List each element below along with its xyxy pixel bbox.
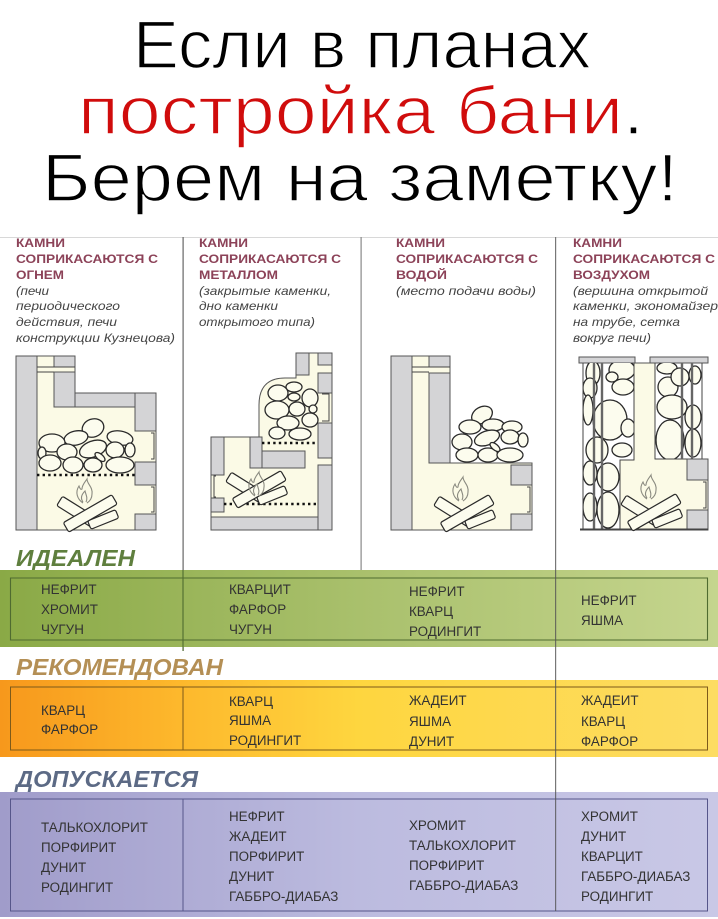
ideal column 2 list: ФАРФОР <box>229 602 286 617</box>
title line 2: постройка бани . <box>78 73 644 149</box>
recommended column 2 list <box>229 694 301 748</box>
column 1 note: конструкции Кузнецова) <box>16 331 175 345</box>
allowed column 2 list: ГАББРО-ДИАБАЗ <box>229 889 338 904</box>
column 2 note: дно каменки <box>199 299 278 313</box>
recommended column 3 list: ЯШМА <box>409 714 451 729</box>
ideal column 3 list: НЕФРИТ <box>409 584 465 599</box>
allowed column 3 list: ТАЛЬКОХЛОРИТ <box>409 838 516 853</box>
column 4 note: каменки, экономайзер <box>573 299 718 313</box>
column 4 note: на трубе, сетка <box>573 315 680 329</box>
title line 3: Берем на заметку! <box>42 140 678 216</box>
column 2 note: открытого типа) <box>199 315 315 329</box>
allowed column 2 list <box>229 809 338 904</box>
allowed column 3 list: ПОРФИРИТ <box>409 858 484 873</box>
column 4 note: вокруг печи) <box>573 331 651 345</box>
panel: column 4 stones touch air <box>573 236 718 531</box>
title <box>42 7 678 216</box>
column 4 note: (вершина открытой <box>573 284 708 298</box>
column 2 heading: СОПРИКАСАЮТСЯ С <box>199 252 341 266</box>
column 1 heading: ОГНЕМ <box>16 268 64 282</box>
column 2 note <box>199 284 331 329</box>
column 4 heading: СОПРИКАСАЮТСЯ С <box>573 252 715 266</box>
allowed column 1 list: ТАЛЬКОХЛОРИТ <box>41 820 148 835</box>
allowed column 1 list <box>41 820 148 895</box>
ideal column 4 list <box>581 593 637 628</box>
panel: column 1 stones touch fire <box>16 236 175 532</box>
column 1 note <box>16 284 175 345</box>
ideal column 3 list <box>409 584 481 639</box>
column 2 note: (закрытые каменки, <box>199 284 331 298</box>
allowed column 2 list: ПОРФИРИТ <box>229 849 304 864</box>
panel: column 3 stones touch water <box>391 236 538 532</box>
column 4 heading: КАМНИ <box>573 236 622 250</box>
allowed column 1 list: РОДИНГИТ <box>41 880 113 895</box>
recommended column 4 list <box>581 693 639 749</box>
column 3 heading: ВОДОЙ <box>396 267 447 282</box>
band: recommended stones <box>0 680 718 757</box>
panel: column 2 stones touch metal <box>199 236 341 530</box>
recommended column 3 list: ЖАДЕИТ <box>409 693 467 708</box>
ideal column 2 list: ЧУГУН <box>229 622 272 637</box>
column 3 note: (место подачи воды) <box>396 284 536 298</box>
band: ideal stones <box>0 570 718 651</box>
stove diagram 3 <box>391 356 532 532</box>
allowed column 4 list: ГАББРО-ДИАБАЗ <box>581 869 690 884</box>
ideal column 1 list: НЕФРИТ <box>41 582 97 597</box>
column 4 note <box>573 284 718 345</box>
allowed column 2 list: НЕФРИТ <box>229 809 285 824</box>
title line 1: Если в планах <box>133 7 591 83</box>
ideal column 2 list <box>229 582 291 637</box>
column 1 heading <box>16 236 158 282</box>
column 2 heading: КАМНИ <box>199 236 248 250</box>
allowed column 2 list: ДУНИТ <box>229 869 274 884</box>
allowed column 4 list: ДУНИТ <box>581 829 626 844</box>
ideal column 1 list: ХРОМИТ <box>41 602 98 617</box>
recommended column 4 list: ЖАДЕИТ <box>581 693 639 708</box>
ideal column 2 list: КВАРЦИТ <box>229 582 291 597</box>
ideal column 1 list: ЧУГУН <box>41 622 84 637</box>
column 1 heading: КАМНИ <box>16 236 65 250</box>
stove diagram 1 <box>16 356 156 532</box>
recommended column 2 list: ЯШМА <box>229 713 271 728</box>
column 3 heading: СОПРИКАСАЮТСЯ С <box>396 252 538 266</box>
stove diagram 2 <box>211 353 332 530</box>
allowed column 1 list: ПОРФИРИТ <box>41 840 116 855</box>
allowed column 4 list <box>581 809 690 904</box>
heading: ideal: ИДЕАЛЕН <box>16 545 135 571</box>
allowed column 2 list: ЖАДЕИТ <box>229 829 287 844</box>
allowed column 4 list: КВАРЦИТ <box>581 849 643 864</box>
column 4 heading: ВОЗДУХОМ <box>573 268 650 282</box>
column 1 note: действия, печи <box>16 315 117 329</box>
heading: recommended: РЕКОМЕНДОВАН <box>16 654 223 680</box>
column 3 heading <box>396 236 538 282</box>
recommended column 4 list: КВАРЦ <box>581 714 625 729</box>
recommended column 3 list: ДУНИТ <box>409 734 454 749</box>
column 2 heading: МЕТАЛЛОМ <box>199 268 278 282</box>
allowed column 4 list: РОДИНГИТ <box>581 889 653 904</box>
allowed column 1 list: ДУНИТ <box>41 860 86 875</box>
recommended column 1 list: КВАРЦ <box>41 703 85 718</box>
column 1 note: (печи <box>16 284 49 298</box>
recommended column 4 list: ФАРФОР <box>581 734 638 749</box>
column 1 heading: СОПРИКАСАЮТСЯ С <box>16 252 158 266</box>
column 1 note: периодического <box>16 299 120 313</box>
allowed column 4 list: ХРОМИТ <box>581 809 638 824</box>
ideal column 3 list: КВАРЦ <box>409 604 453 619</box>
column 3 heading: КАМНИ <box>396 236 445 250</box>
ideal column 1 list <box>41 582 98 637</box>
recommended column 3 list <box>409 693 467 749</box>
recommended column 1 list <box>41 703 98 737</box>
band: allowed stones <box>0 792 718 917</box>
recommended column 1 list: ФАРФОР <box>41 722 98 737</box>
column 4 heading <box>573 236 715 282</box>
allowed column 3 list <box>409 818 518 893</box>
recommended column 2 list: КВАРЦ <box>229 694 273 709</box>
ideal column 4 list: НЕФРИТ <box>581 593 637 608</box>
allowed column 3 list: ХРОМИТ <box>409 818 466 833</box>
ideal column 4 list: ЯШМА <box>581 613 623 628</box>
stove diagram 4 <box>579 357 708 531</box>
ideal column 3 list: РОДИНГИТ <box>409 624 481 639</box>
heading: allowed: ДОПУСКАЕТСЯ <box>14 766 199 792</box>
column 2 heading <box>199 236 341 282</box>
allowed column 3 list: ГАББРО-ДИАБАЗ <box>409 878 518 893</box>
recommended column 2 list: РОДИНГИТ <box>229 733 301 748</box>
